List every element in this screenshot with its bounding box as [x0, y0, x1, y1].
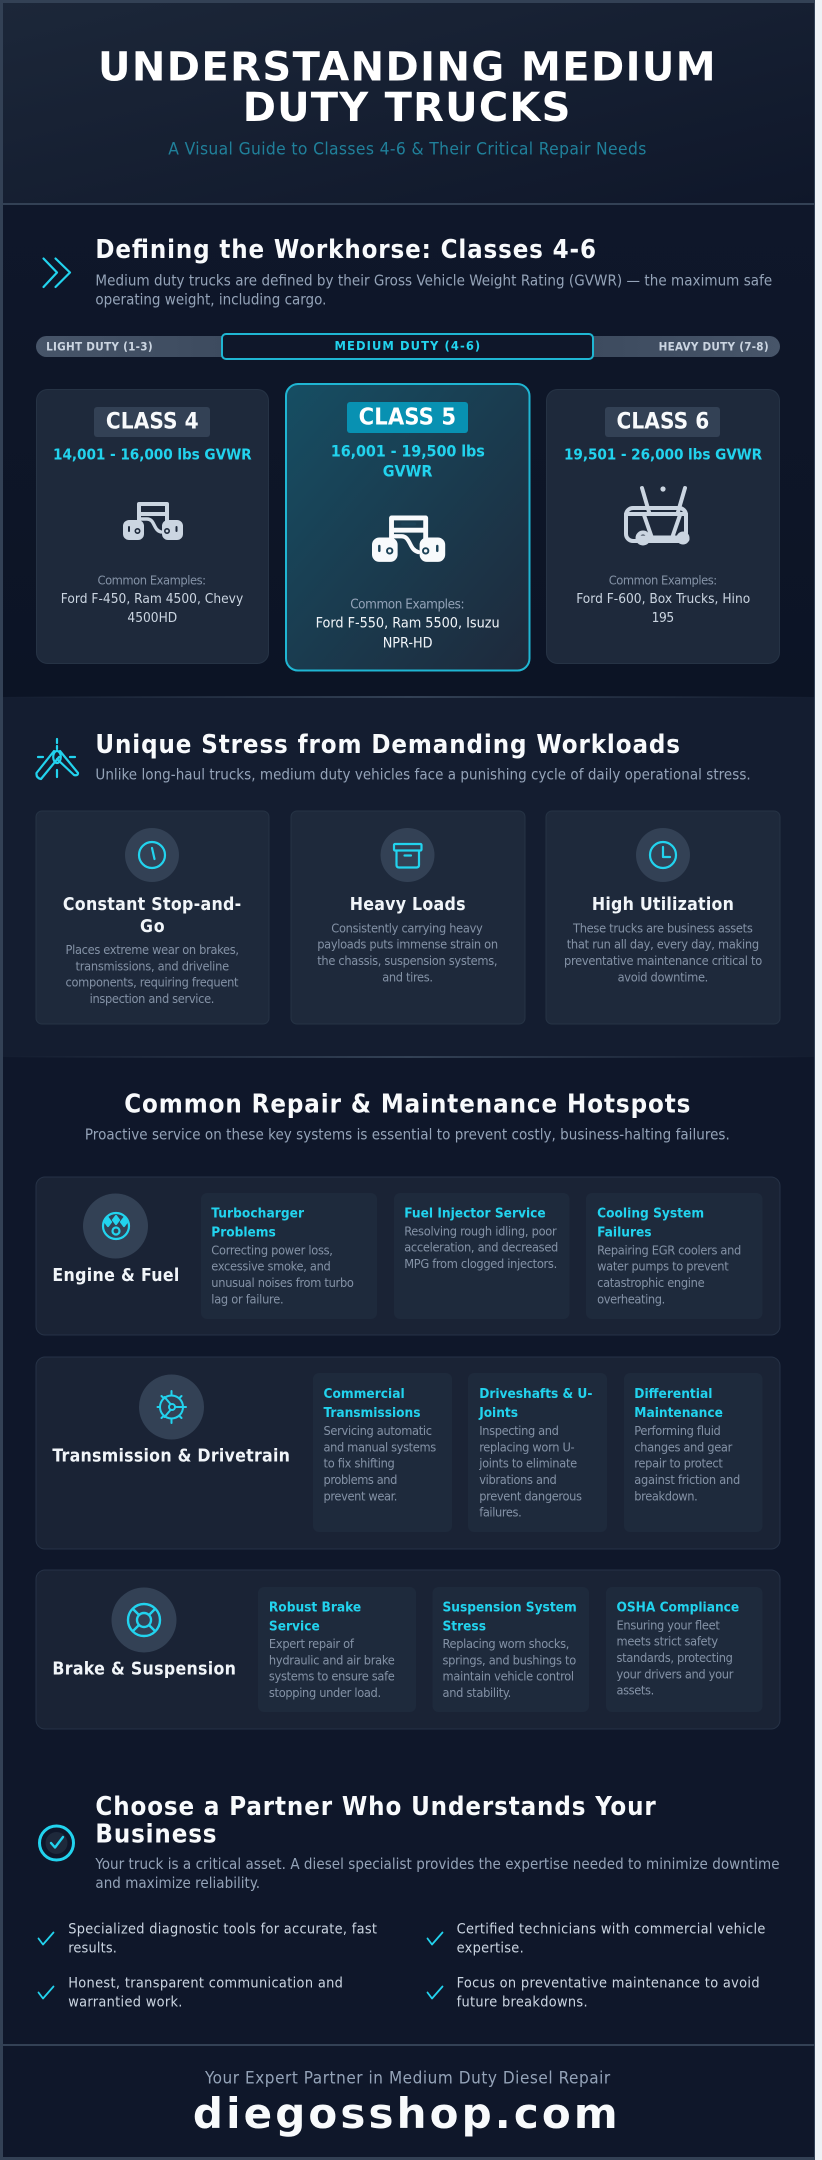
card: stop and go — [36, 811, 269, 1024]
card: high utilization: preventative maintenance critical to — [564, 953, 762, 968]
card: high utilization: avoid downtime. — [618, 969, 708, 984]
panel: transmission and drivetrain: Transmission & Drivetrain — [52, 1446, 290, 1466]
panel: transmission and drivetrain — [36, 1357, 780, 1549]
card: commercial transmissions: and manual systems — [324, 1439, 436, 1454]
icon: clock — [139, 842, 165, 868]
card: heavy loads: the chassis, suspension systems, — [317, 953, 498, 968]
heading: hotspots: Common Repair & Maintenance Hotspots — [124, 1090, 690, 1120]
checklist item: communication: Honest, transparent communication and — [68, 1976, 343, 1992]
card: turbocharger: lag or failure. — [211, 1291, 284, 1306]
footer: diegosshop.com — [193, 2089, 618, 2138]
checklist item: certified technicians: Certified technicians with commercial vehicle — [457, 1922, 765, 1938]
checklist item: certified technicians: expertise. — [457, 1940, 524, 1956]
icon: clock — [650, 842, 676, 868]
icon: check circle — [40, 1826, 74, 1860]
card: differential: Maintenance — [634, 1405, 723, 1421]
card: turbocharger: excessive smoke, and — [211, 1259, 331, 1274]
duty spectrum bar: MEDIUM DUTY (4-6) — [334, 339, 480, 354]
card: turbocharger — [201, 1193, 377, 1319]
card: cooling system — [586, 1193, 762, 1319]
intro text — [94, 1855, 779, 1892]
intro text: Unlike long-haul trucks, medium duty vehicles face a punishing cycle of daily operational stress. — [95, 766, 751, 784]
card: suspension: and stability. — [442, 1685, 511, 1700]
heading: partner: Choose a Partner Who Understands Your — [95, 1792, 656, 1822]
card: turbocharger: Correcting power loss, — [211, 1242, 333, 1257]
section: defining the workhorse — [3, 205, 814, 697]
card: suspension: maintain vehicle control — [442, 1669, 574, 1684]
heading: partner — [95, 1792, 656, 1849]
card: differential — [624, 1373, 762, 1532]
footer: Your Expert Partner in Medium Duty Diesel Repair — [204, 2068, 611, 2088]
duty spectrum bar: LIGHT DUTY (1-3) — [46, 340, 153, 354]
card: class 4: CLASS 4 — [106, 408, 199, 434]
card: driveshafts — [468, 1373, 607, 1532]
card: differential: repair to protect — [634, 1456, 723, 1471]
icon: gear — [158, 1391, 186, 1423]
card: differential: Performing fluid — [634, 1423, 721, 1438]
duty spectrum bar: HEAVY DUTY (7-8) — [659, 340, 769, 354]
title: DUTY TRUCKS — [243, 85, 570, 131]
card: class 5: 16,001 - 19,500 lbs — [331, 442, 485, 460]
card: heavy loads: payloads puts immense strain on — [317, 937, 498, 952]
card: osha — [606, 1587, 762, 1712]
card: differential: against friction and — [634, 1472, 740, 1487]
title: UNDERSTANDING MEDIUM — [98, 44, 716, 90]
card: stop and go: transmissions, and driveline — [76, 958, 229, 973]
card: suspension: Replacing worn shocks, — [442, 1636, 569, 1651]
card: fuel injector: acceleration, and decreased — [404, 1240, 558, 1255]
heading: unique stress: Unique Stress from Demanding Workloads — [95, 730, 680, 760]
card: stop and go: inspection and service. — [90, 991, 214, 1006]
card: brake service: stopping under load. — [269, 1685, 381, 1700]
title — [98, 44, 716, 131]
card: suspension — [432, 1587, 589, 1712]
card: commercial transmissions: problems and — [324, 1472, 397, 1487]
icon: chevrons — [44, 258, 70, 287]
card: differential: Differential — [634, 1386, 712, 1402]
section: repair hotspots — [36, 1090, 780, 1729]
card: class 6: CLASS 6 — [616, 408, 709, 434]
card: brake service: hydraulic and air brake — [269, 1652, 395, 1667]
card: commercial transmissions: to fix shifting — [324, 1456, 395, 1471]
card: high utilization — [546, 811, 780, 1024]
card: class 4 — [36, 390, 268, 664]
checklist item: diagnostic tools: Specialized diagnostic tools for accurate, fast — [68, 1922, 377, 1938]
card: osha: meets strict safety — [616, 1634, 718, 1649]
panel: engine and fuel — [36, 1177, 780, 1335]
card: brake service: Service — [269, 1618, 320, 1634]
card: class 6: 195 — [652, 610, 674, 626]
checklist item: preventative maintenance: future breakdowns. — [457, 1994, 588, 2010]
card: commercial transmissions: Commercial — [324, 1386, 405, 1402]
card: fuel injector: Fuel Injector Service — [404, 1206, 546, 1222]
card: driveshafts: Driveshafts & U- — [479, 1386, 592, 1402]
header — [3, 3, 814, 205]
card: class 4: Ford F-450, Ram 4500, Chevy — [61, 591, 243, 607]
card: stop and go: Go — [140, 917, 165, 937]
checklist item: communication — [38, 1976, 343, 2010]
intro text: Proactive service on these key systems is essential to prevent costly, business-halting failures. — [85, 1125, 730, 1143]
card: class 6 — [546, 390, 780, 664]
heading: partner: Business — [95, 1819, 216, 1849]
icon: stress — [36, 739, 78, 779]
card: heavy loads: Consistently carrying heavy — [331, 920, 483, 935]
card: osha: OSHA Compliance — [616, 1600, 739, 1616]
card: class 5: NPR-HD — [383, 636, 433, 652]
intro text: and maximize reliability. — [95, 1874, 260, 1892]
icon: truck — [125, 504, 181, 538]
card: driveshafts: joints to eliminate — [478, 1456, 577, 1471]
card: driveshafts: replacing worn U- — [479, 1439, 575, 1454]
icon: box truck — [626, 486, 688, 544]
icon: engine — [103, 1213, 129, 1239]
card: driveshafts: Inspecting and — [479, 1423, 559, 1438]
card: suspension: Suspension System — [442, 1600, 577, 1616]
card: differential: changes and gear — [634, 1439, 733, 1454]
card: commercial transmissions: prevent wear. — [324, 1488, 397, 1503]
card: class 5: Common Examples: — [350, 598, 464, 612]
card: turbocharger: unusual noises from turbo — [211, 1275, 354, 1290]
intro text: operating weight, including cargo. — [95, 290, 326, 308]
card: commercial transmissions — [313, 1373, 452, 1532]
card: cooling system: water pumps to prevent — [597, 1259, 729, 1274]
checklist item: preventative maintenance: Focus on preventative maintenance to avoid — [457, 1976, 760, 1992]
checklist item: preventative maintenance — [428, 1976, 760, 2010]
card: brake service — [258, 1587, 416, 1712]
card: cooling system: Failures — [597, 1224, 652, 1240]
card: brake service: Robust Brake — [269, 1600, 361, 1616]
card: osha: Ensuring your fleet — [616, 1617, 720, 1632]
card: stop and go: Places extreme wear on brakes, — [66, 942, 239, 957]
card: class 5: Ford F-550, Ram 5500, Isuzu — [316, 616, 500, 632]
card: heavy loads — [291, 811, 525, 1024]
card: driveshafts: vibrations and — [479, 1472, 557, 1487]
checklist item: certified technicians — [428, 1922, 765, 1956]
card: cooling system: overheating. — [597, 1291, 665, 1306]
panel: engine and fuel: Engine & Fuel — [52, 1266, 179, 1286]
card: heavy loads: Heavy Loads — [350, 895, 466, 915]
subtitle: A Visual Guide to Classes 4-6 & Their Critical Repair Needs — [168, 140, 646, 160]
card: brake service: Expert repair of — [269, 1636, 355, 1651]
card: high utilization: that run all day, every day, making — [567, 937, 759, 952]
duty spectrum bar — [36, 334, 780, 359]
icon: box — [394, 844, 422, 868]
card: high utilization: High Utilization — [592, 895, 734, 915]
panel: brake and suspension — [36, 1570, 780, 1729]
card: fuel injector: Resolving rough idling, poor — [404, 1223, 557, 1238]
footer — [3, 2044, 814, 2138]
card: driveshafts: failures. — [479, 1505, 522, 1520]
card: class 5 — [286, 384, 530, 670]
intro text: Medium duty trucks are defined by their Gross Vehicle Weight Rating (GVWR) — the maximum safe — [95, 272, 772, 290]
card: turbocharger: Turbocharger — [211, 1206, 304, 1222]
icon: truck — [374, 518, 443, 559]
card: differential: breakdown. — [634, 1488, 698, 1503]
card: stop and go: Constant Stop-and- — [63, 895, 241, 915]
section: unique stress — [3, 696, 814, 1058]
card: class 6: 19,501 - 26,000 lbs GVWR — [564, 446, 763, 464]
card: fuel injector — [394, 1193, 570, 1319]
card: driveshafts: prevent dangerous — [479, 1488, 582, 1503]
card: suspension: Stress — [442, 1618, 486, 1634]
icon: lifebuoy — [128, 1604, 160, 1636]
card: commercial transmissions: Transmissions — [324, 1405, 420, 1421]
checklist item: diagnostic tools: results. — [68, 1940, 117, 1956]
card: cooling system: Cooling System — [597, 1206, 704, 1222]
card: brake service: systems to ensure safe — [269, 1669, 395, 1684]
card: cooling system: Repairing EGR coolers and — [597, 1242, 741, 1257]
heading: defining the workhorse: Defining the Workhorse: Classes 4-6 — [95, 235, 596, 265]
intro text — [95, 272, 772, 308]
card: class 4: 14,001 - 16,000 lbs GVWR — [53, 446, 252, 464]
card: heavy loads: and tires. — [382, 969, 433, 984]
checklist item: diagnostic tools — [38, 1922, 377, 1956]
section: choose a partner — [38, 1792, 780, 2010]
card: class 4: Common Examples: — [98, 574, 206, 588]
intro text: Your truck is a critical asset. A diesel specialist provides the expertise needed to minimize downtime — [94, 1855, 779, 1873]
checklist item: communication: warrantied work. — [68, 1994, 182, 2010]
card: fuel injector: MPG from clogged injectors. — [404, 1256, 557, 1271]
card: driveshafts: Joints — [478, 1405, 518, 1421]
card: class 6: Ford F-600, Box Trucks, Hino — [576, 591, 750, 607]
card: turbocharger: Problems — [211, 1224, 276, 1240]
card: cooling system: catastrophic engine — [597, 1275, 705, 1290]
card: stop and go: components, requiring frequent — [66, 975, 239, 990]
card: osha: standards, protecting — [616, 1650, 733, 1665]
card: commercial transmissions: Servicing automatic — [324, 1423, 432, 1438]
card: class 6: Common Examples: — [609, 574, 717, 588]
card: high utilization: These trucks are business assets — [572, 920, 753, 935]
card: osha: assets. — [616, 1683, 654, 1698]
card: class 5: CLASS 5 — [359, 402, 456, 430]
card: osha: your drivers and your — [616, 1666, 734, 1681]
card: class 5: GVWR — [383, 462, 432, 480]
panel: brake and suspension: Brake & Suspension — [52, 1660, 236, 1680]
card: suspension: springs, and bushings to — [442, 1652, 576, 1667]
card: class 4: 4500HD — [127, 610, 177, 626]
